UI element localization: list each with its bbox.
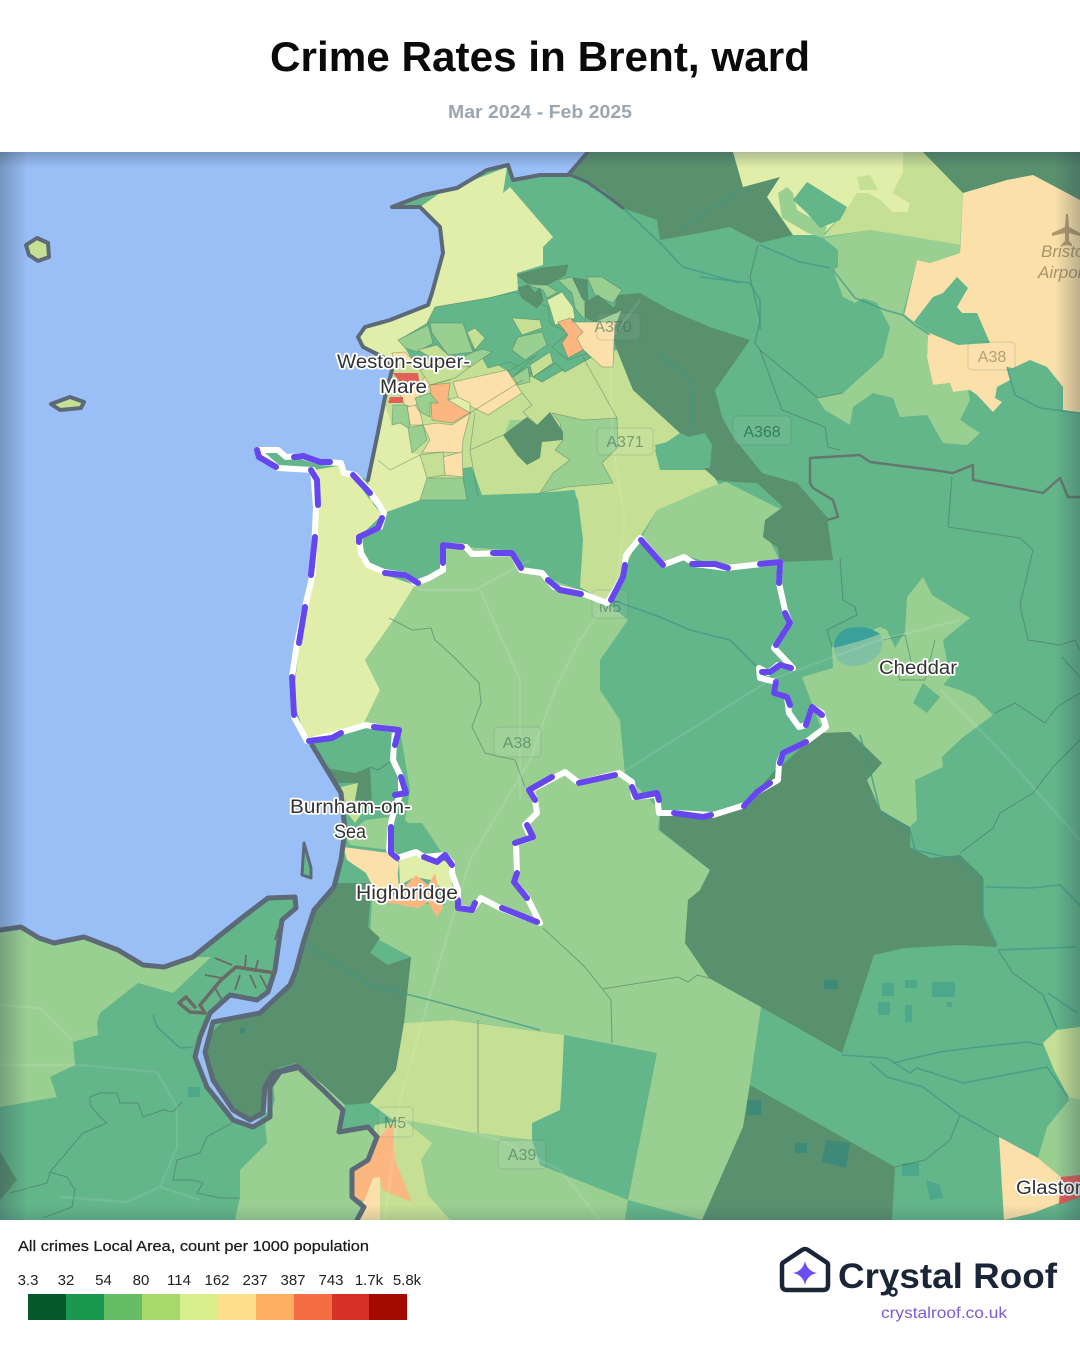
road label: A371	[597, 428, 653, 455]
legend scale values: 3.3	[18, 1272, 38, 1289]
place label: Weston-super-Mare	[337, 352, 470, 398]
title: Crime Rates in Brent, ward	[270, 33, 810, 80]
legend scale values: 1.7k	[355, 1272, 384, 1289]
legend scale values: 387	[280, 1272, 306, 1289]
legend scale values: 80	[133, 1272, 149, 1289]
road label: M5 north: M5	[599, 599, 621, 616]
road label: A38 north	[968, 342, 1015, 370]
logo: Crystal Roof	[782, 1249, 1057, 1322]
county border	[810, 455, 1080, 520]
map edge shading	[0, 152, 1080, 1220]
rivers and rhynes	[153, 190, 1080, 1130]
legend scale values: 162	[204, 1272, 230, 1289]
place label: Glastonbury (clipped): Glaston	[1016, 1178, 1080, 1199]
road label: A38	[494, 727, 541, 757]
road label: A38 north: A38	[978, 349, 1006, 366]
legend title: All crimes Local Area, count per 1000 population	[18, 1238, 369, 1255]
legend colour swatches	[28, 1294, 407, 1320]
legend scale values: 32	[58, 1272, 74, 1289]
road label: A371: A371	[606, 434, 644, 451]
thin ward boundaries	[10, 245, 1080, 1218]
ward areas: central dark and eastern light	[358, 293, 1080, 1177]
coastline strokes	[0, 153, 623, 1220]
ward areas: central plain and south	[0, 465, 1080, 1220]
faint road network	[0, 300, 1080, 1220]
road label: A38: A38	[503, 735, 531, 752]
icon: key ring on y	[890, 1288, 896, 1296]
website: crystalroof.co.uk	[881, 1305, 1008, 1322]
airport icon and label	[1037, 214, 1080, 282]
road label: A368: A368	[743, 424, 781, 441]
place label: Weston-super-Mare: Mare	[380, 377, 427, 398]
legend	[18, 1238, 422, 1320]
place label: Weston-super-Mare: Weston-super-	[337, 352, 470, 373]
icon: house with star	[782, 1249, 828, 1290]
brand name: Crystal Roof	[838, 1257, 1057, 1296]
road label: M5 south: M5	[384, 1115, 406, 1132]
road label: M5 north	[592, 590, 628, 618]
road label: M5 south	[378, 1107, 413, 1137]
subtitle: date range: Mar 2024 - Feb 2025	[448, 102, 632, 122]
road label: A368	[733, 416, 791, 445]
place label: Burnham-on-Sea: Burnham-on-	[290, 797, 411, 818]
road label: A370	[594, 313, 640, 340]
water and reservoirs	[188, 627, 955, 1200]
choropleth map	[0, 152, 1080, 1220]
islands: Steep Holm, Flat Holm, Stert	[26, 238, 311, 878]
legend scale values: 743	[318, 1272, 344, 1289]
legend scale values: 114	[167, 1272, 191, 1289]
ward areas: Weston-super-Mare	[358, 167, 712, 513]
place label: Burnham-on-Sea: Sea	[334, 822, 366, 843]
ward boundary: purple dashes	[257, 450, 822, 922]
legend scale values: 54	[95, 1272, 112, 1289]
legend scale values: 5.8k	[393, 1272, 422, 1289]
place label: Highbridge: Highbridge	[356, 883, 458, 904]
legend scale values: 237	[242, 1272, 268, 1289]
road label: A39	[498, 1140, 546, 1169]
ward areas: north-east	[570, 152, 1080, 445]
ward boundary: white base line	[257, 450, 826, 923]
ward areas: Burnham-on-Sea and Highbridge	[329, 767, 453, 917]
road label: A370: A370	[594, 319, 632, 336]
place label: Cheddar: Cheddar	[879, 658, 958, 679]
sea: Bristol Channel	[0, 152, 587, 1127]
legend scale values	[18, 1272, 422, 1289]
road label: A39: A39	[508, 1147, 536, 1164]
place label: Burnham-on-Sea	[290, 797, 411, 843]
creeks on the peninsula	[205, 925, 280, 1000]
